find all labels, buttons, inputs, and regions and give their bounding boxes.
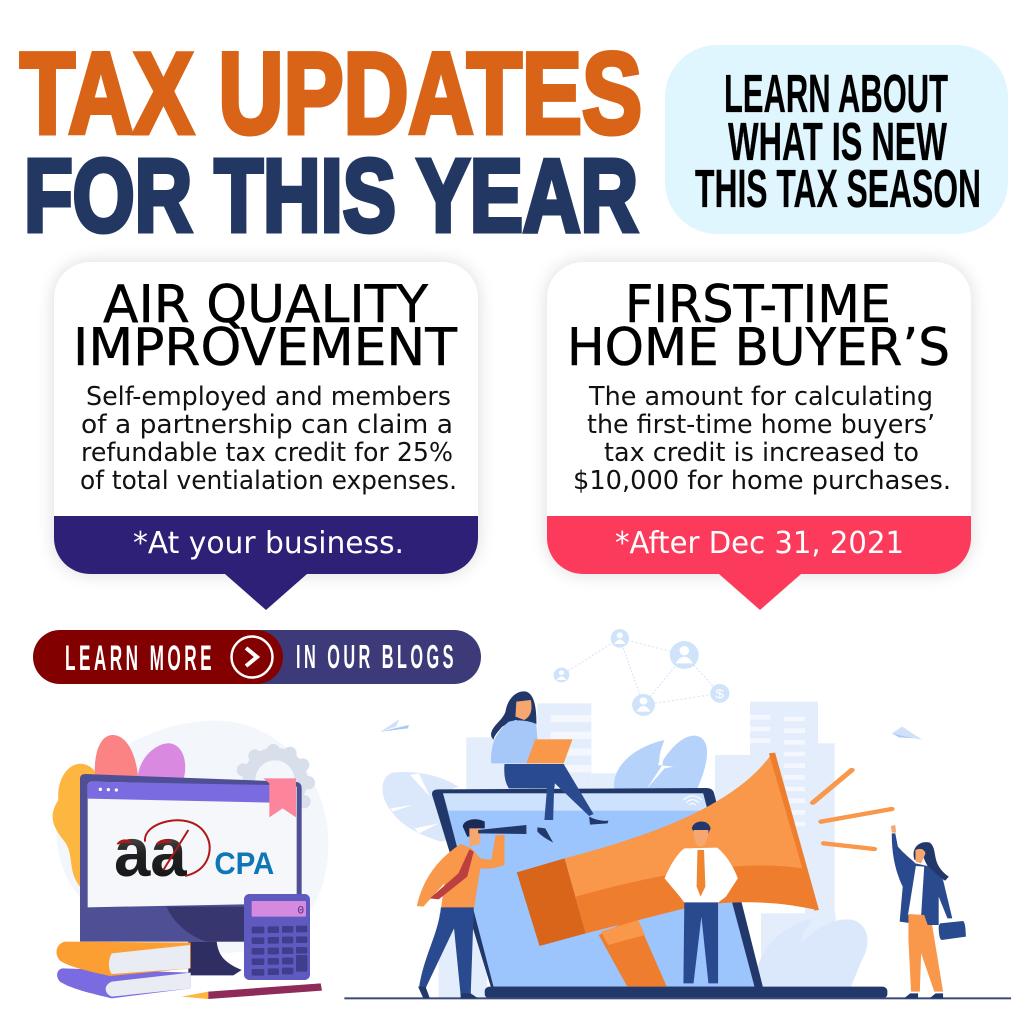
books (56, 942, 191, 998)
title (20, 30, 642, 253)
heading: air quality: IMPROVEMENT (73, 318, 457, 378)
heading: air quality (73, 275, 457, 378)
heading: first-time (567, 275, 950, 378)
button: learn more in our blogs: IN OUR BLOGS (296, 638, 457, 675)
leaves (382, 736, 867, 987)
title: TAX UPDATES (20, 30, 642, 158)
text: home buyers body: the first-time home buyers’ (587, 410, 935, 440)
logo: aa cpa: aa (114, 815, 188, 891)
panel: air quality improvement (54, 262, 478, 610)
icon: wifi (683, 796, 702, 805)
band: after dec 31 (547, 516, 971, 610)
title: FOR THIS YEAR (24, 138, 638, 253)
calculator: 0 (297, 905, 304, 917)
note: after dec 31: *After Dec 31, 2021 (615, 526, 904, 561)
buildings (439, 702, 836, 998)
person: woman with laptop (491, 691, 608, 843)
icon: gear (237, 744, 315, 808)
text: air quality body (80, 382, 457, 496)
logo: aa cpa (114, 815, 274, 891)
monitor (80, 774, 302, 975)
button: learn more in our blogs: LEARN MORE (65, 639, 215, 678)
leaves (53, 735, 185, 887)
laptop (432, 788, 887, 998)
heading: air quality: AIR QUALITY (103, 275, 428, 335)
icon: arrow circle (232, 636, 272, 678)
pencil (182, 983, 322, 999)
person: man with telescope (417, 819, 526, 998)
text: home buyers body: The amount for calculating (588, 382, 933, 412)
network nodes (554, 629, 729, 716)
illustration: computer with cpa logo (53, 721, 328, 999)
button: learn more in our blogs (33, 630, 481, 684)
illustration: megaphone marketing scene (344, 629, 1011, 999)
paper planes (380, 719, 922, 740)
band: at your business (54, 516, 478, 610)
person: man in white shirt (665, 821, 738, 983)
calculator (244, 894, 310, 980)
megaphone (517, 753, 819, 987)
callout: learn about (665, 45, 1008, 234)
panel: first-time home buyers (547, 262, 971, 610)
text: home buyers body (573, 382, 951, 496)
logo: aa cpa: CPA (214, 845, 274, 881)
heading: first-time: HOME BUYER’S (567, 318, 950, 378)
heading: first-time: FIRST-TIME (625, 275, 891, 335)
text: home buyers body: tax credit is increased to (604, 438, 919, 468)
text: home buyers body: $10,000 for home purchases. (573, 466, 951, 496)
text: air quality body: of a partnership can claim a (81, 410, 453, 440)
ground line (344, 997, 1011, 999)
network nodes: $ (715, 687, 724, 701)
person: woman with briefcase (891, 825, 966, 998)
note: at your business: *At your business. (133, 526, 404, 561)
sound lines (813, 770, 892, 849)
text: air quality body: of total ventialation expenses. (80, 466, 457, 496)
text: air quality body: Self-employed and members (86, 382, 451, 412)
text: air quality body: refundable tax credit for 25% (81, 438, 453, 468)
icon: bookmark (263, 778, 296, 817)
